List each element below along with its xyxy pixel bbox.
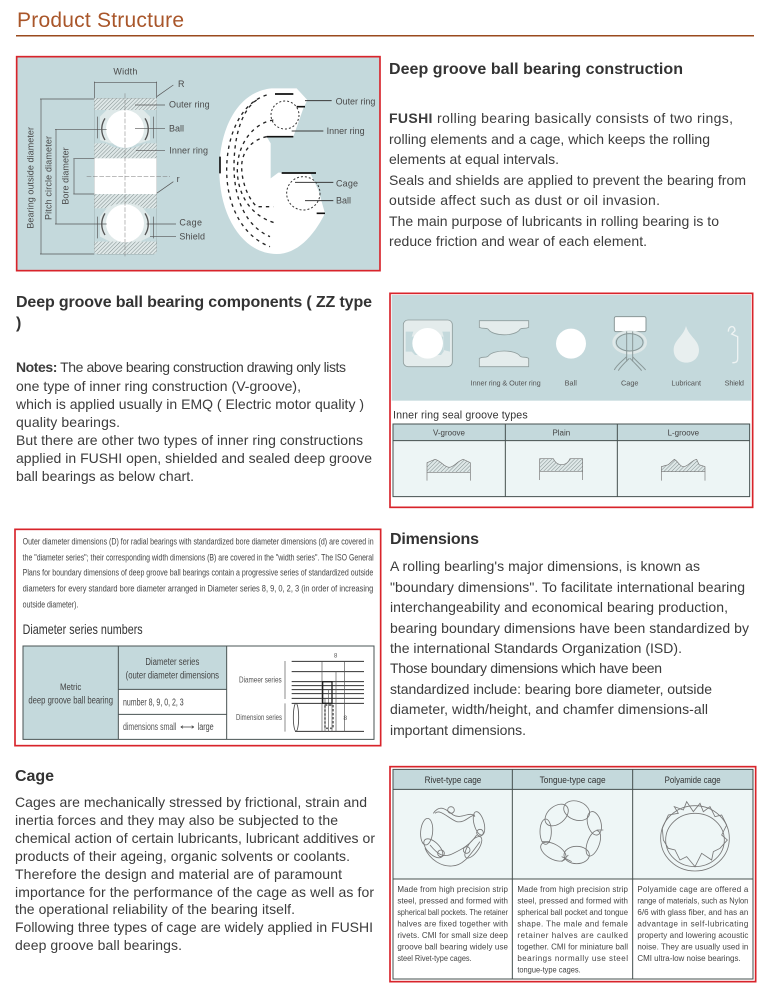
component labels (471, 379, 744, 388)
diagram labels: Width (113, 67, 137, 77)
text: polyamide description: noise. They are usually used in (637, 943, 748, 952)
text block: construction: FUSHI rolling bearing basically consists of two rings, (389, 110, 733, 126)
text block: notes: applied in FUSHI open, shielded and sealed deep groove (16, 450, 372, 466)
text block: cage: Following three types of cage are widely applied in FUSHI (15, 919, 373, 935)
text block: dimensions: diameter, width/height, and chamfer dimensions-all (390, 701, 708, 717)
icon: cage (614, 317, 646, 371)
text block: construction (389, 110, 746, 249)
text block: dimensions: the international Standards Organization (ISD). (390, 640, 682, 656)
cross-section drawing (40, 82, 176, 257)
text: rivet-type description: Made from high precision strip (397, 885, 509, 894)
text: tongue-type description: Made from high precision strip (517, 885, 629, 894)
diagram labels: R (178, 79, 185, 89)
text block: cage: Cages are mechanically stressed by frictional, strain and (15, 794, 367, 810)
heading: cage: Cage (15, 768, 54, 785)
text block: notes: ball bearings as below chart. (16, 468, 194, 484)
diagram labels: Shield (179, 232, 205, 242)
diagram labels: Cage (179, 218, 202, 228)
table: seal groove types (393, 424, 750, 497)
text block: cage: Therefore the design and material are of paramount (15, 866, 342, 882)
diagram labels: Inner ring (169, 145, 208, 155)
table: cage types (393, 769, 753, 979)
text block: construction: outside affect such as dust or oil invasion. (389, 192, 660, 208)
text block: dimensions: bearing boundary dimensions have been standardized by (390, 620, 749, 636)
diagram labels: Ball (169, 124, 184, 134)
page title: Product Structure (17, 9, 184, 32)
component labels: Cage (621, 379, 639, 388)
heading: diameter series numbers: Diameter series numbers (23, 621, 143, 637)
icon: lubricant drop (674, 326, 699, 363)
text: polyamide description: CMI ultra-low noise bearings. (637, 954, 741, 963)
text: rivet-type description: steel Rivet-type cages. (397, 954, 472, 963)
text block: construction: elements at equal intervals. (389, 151, 559, 167)
icon: ball (556, 329, 586, 359)
table: seal groove types: L-groove (668, 428, 700, 437)
text: polyamide description: property and lowering acoustic (637, 931, 748, 940)
text: tongue-type description: together. CMI for miniature ball (517, 943, 628, 952)
component labels: Inner ring & Outer ring (471, 379, 541, 388)
text: tongue-type description: tongue-type cages. (517, 965, 581, 974)
diagram labels: Bearing outside diameter (25, 127, 35, 229)
table: seal groove types: Plain (552, 428, 570, 437)
heading: components (16, 294, 372, 332)
component labels: Ball (565, 379, 577, 388)
text block: cage: the operational reliability of the bearing itself. (15, 901, 295, 917)
text: tongue-type description: bearings normally use steel (517, 954, 628, 963)
table: cage types: Rivet-type cage (425, 775, 481, 785)
panel: diameter series (15, 529, 381, 746)
drawing: rivet-type cage (420, 807, 487, 866)
text: rivet-type description (397, 885, 509, 963)
text block: dimensions: A rolling bearling's major dimensions, is known as (390, 558, 700, 574)
text block: dimensions: standardized include: bearing bore diameter, outside (390, 681, 712, 697)
text block: dimensions (390, 558, 749, 738)
diagram labels: Cage (336, 178, 358, 188)
chart: series scale: Dimension series (236, 712, 282, 722)
heading: components: Deep groove ball bearing components ( ZZ type (16, 294, 372, 311)
text: polyamide description: range of materials, such as Nylon (637, 896, 748, 905)
table: diameter series: number 8, 9, 0, 2, 3 (123, 697, 184, 708)
text block: dimensions: important dimensions. (390, 722, 526, 738)
text block: notes: Notes: The above bearing construction drawing only lists (16, 359, 346, 375)
diagram labels: Outer ring (169, 100, 210, 110)
text block: cage: chemical action of certain lubricants, lubricant additives or (15, 830, 375, 846)
text block: dimensions: Those boundary dimensions which have been (390, 660, 662, 676)
text: rivet-type description: halves are fixed together with (397, 919, 508, 928)
text block: construction: Seals and shields are applied to prevent the bearing from (389, 172, 746, 188)
diagram labels: Pitch circle diameter (44, 136, 54, 220)
text block: notes: quality bearings. (16, 414, 120, 430)
text block: diameter series intro: outside diameter). (23, 599, 78, 609)
text block: notes: But there are other two types of inner ring constructions (16, 432, 363, 448)
diagram labels: r (177, 174, 180, 184)
text: polyamide description: 6/6 with glass fiber, and has an (637, 908, 748, 917)
text block: construction: The main purpose of lubricants in rolling bearing is to (389, 213, 719, 229)
diagram labels (25, 67, 375, 242)
table: cage types: Polyamide cage (665, 775, 721, 785)
text block: notes: which is applied usually in EMQ ( Electric motor quality ) (15, 396, 364, 412)
table: diameter series (23, 646, 374, 739)
diagram labels: Inner ring (327, 126, 365, 136)
text: tongue-type description: retainer halves are caulked (517, 931, 628, 940)
diagram labels: Outer ring (336, 97, 375, 107)
text block: construction: reduce friction and wear of each element. (389, 233, 647, 249)
text block: diameter series intro: the "diameter series"; their corresponding width dimensions (B) are covered in the "width series". The ISO General (23, 552, 374, 562)
profile: plain (540, 459, 583, 480)
text block: diameter series intro (23, 536, 374, 609)
text block: cage: inertia forces and they may also be subjected to the (15, 812, 338, 828)
chart: series scale: Diameer series (239, 674, 282, 684)
text block: construction: rolling elements and a cage, which keeps the rolling (389, 131, 710, 147)
icon: assembled bearing (403, 320, 452, 367)
table: diameter series: Diameter series (145, 657, 199, 668)
text block: notes (15, 359, 372, 484)
text: polyamide description: Polyamide cage are offered a (637, 885, 749, 894)
text block: dimensions: interchangeability and economical bearing production, (390, 599, 728, 615)
table: diameter series: (outer diameter dimensions (126, 670, 219, 681)
text: tongue-type description (517, 885, 629, 974)
panel: bearing construction diagram (17, 57, 380, 271)
text block: diameter series intro: Outer diameter dimensions (D) for radial bearings with standardized bore diameter dimensions (d) are covered in (23, 536, 374, 546)
diagram labels: Ball (336, 196, 351, 206)
text: tongue-type description: steel, pressed and formed with (517, 896, 628, 905)
chart: series scale (236, 654, 364, 732)
text: polyamide description: advantage in self-lubricating (637, 919, 748, 928)
table: diameter series: deep groove ball bearing (28, 695, 113, 706)
table: diameter series: large (198, 722, 214, 733)
component labels: Shield (725, 379, 744, 388)
text block: notes: one type of inner ring construction (V-groove), (16, 378, 301, 394)
text: rivet-type description: steel, pressed and formed with (397, 896, 508, 905)
text: rivet-type description: rivets. CMI for small size deep (397, 931, 509, 940)
diagram labels: Bore diameter (61, 147, 71, 205)
component labels: Lubricant (671, 379, 701, 388)
icon: shield (728, 327, 738, 363)
heading: construction: Deep groove ball bearing construction (389, 61, 683, 78)
text: polyamide description (637, 885, 749, 963)
drawing: tongue-type cage (538, 797, 604, 865)
table: diameter series: dimensions small (123, 722, 176, 733)
text block: cage (15, 794, 375, 953)
drawing: polyamide cage (661, 802, 729, 871)
table: diameter series: Metric (60, 682, 82, 692)
table: seal groove types: V-groove (433, 428, 466, 437)
text block: diameter series intro: diameters for every standard bore diameter arranged in Diameter series 8, 9, 0, 2, 3 (in order of increasing (23, 584, 373, 594)
text block: dimensions: "boundary dimensions". To facilitate international bearing (390, 579, 745, 595)
table: cage types: Tongue-type cage (540, 775, 606, 785)
text block: diameter series intro: Plans for boundary dimensions of deep groove ball bearings contain a progressive series of standardized outside (23, 568, 373, 578)
text block: cage: products of their ageing, organic solvents or coolants. (15, 848, 350, 864)
profile: V-groove (427, 459, 470, 481)
chart: series scale: 8 (334, 654, 338, 660)
icon: inner and outer ring (479, 321, 529, 367)
heading: seal groove types: Inner ring seal groove types (393, 409, 528, 421)
text block: cage: deep groove ball bearings. (15, 937, 182, 953)
profile: L-groove (661, 459, 705, 481)
text block: cage: importance for the performance of the cage as well as for (15, 884, 374, 900)
panel: bearing components (390, 293, 753, 507)
text: rivet-type description: groove ball bearing widely use (397, 943, 509, 952)
text: rivet-type description: spherical ball pockets. The retainer (397, 908, 508, 917)
cutaway bearing drawing (219, 88, 333, 254)
text: tongue-type description: shape. The male and female (517, 919, 629, 928)
panel: cage types (390, 767, 756, 982)
text: tongue-type description: spherical ball pocket and tongue (517, 908, 629, 917)
heading: components: ) (16, 315, 21, 332)
chart: series scale: 8 (343, 715, 347, 722)
heading: dimensions: Dimensions (390, 531, 479, 548)
